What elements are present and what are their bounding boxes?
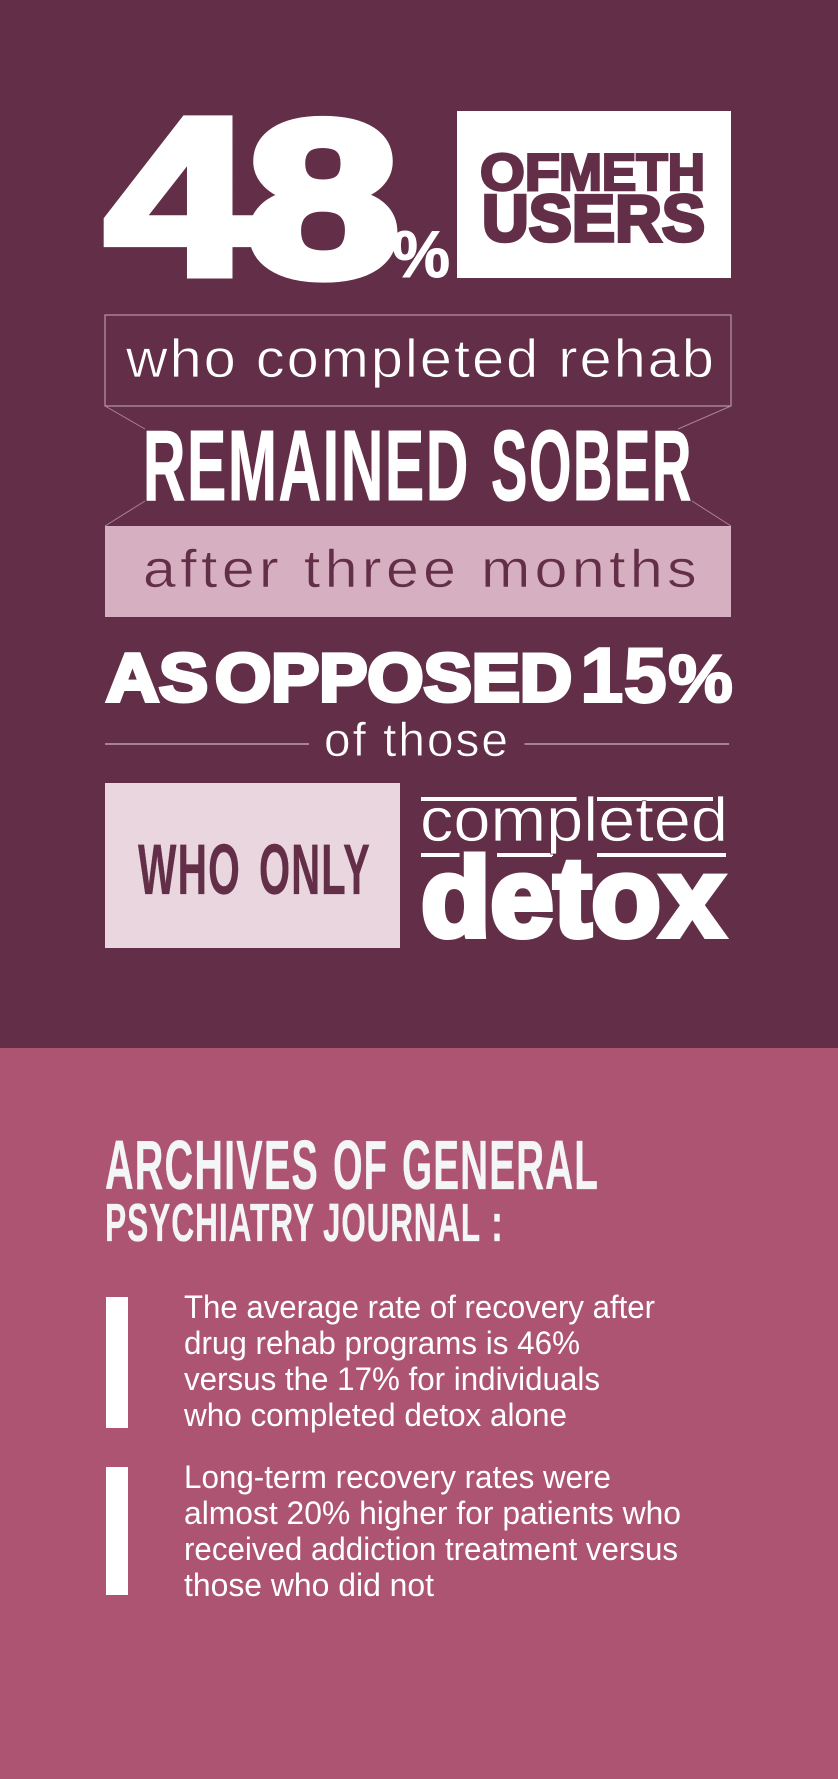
finding 2: [106, 1459, 681, 1603]
callout: of meth users: [457, 111, 731, 278]
panel: journal findings: [0, 1048, 838, 1779]
divider with text: of those: of those: [324, 713, 510, 766]
box: who only: ONLY: [259, 831, 371, 910]
finding 2: those who did not: [184, 1567, 434, 1603]
heading: as opposed 15%: 15: [580, 631, 667, 719]
finding 1: who completed detox alone: [183, 1397, 567, 1433]
big number: 48%: %: [392, 217, 450, 291]
heading: archives of general psychiatry journal: JOURNAL: [323, 1193, 481, 1253]
callout: of meth users: OF: [480, 144, 560, 202]
callout: of meth users: USERS: [482, 181, 705, 255]
finding 1: The average rate of recovery after: [184, 1289, 655, 1325]
heading: remained sober: REMAINED: [143, 410, 470, 522]
heading: archives of general psychiatry journal: :: [491, 1193, 503, 1253]
finding 1: drug rehab programs is 46%: [184, 1325, 580, 1361]
big number: 48%: 8: [247, 76, 399, 322]
heading: as opposed 15%: AS: [106, 640, 208, 716]
big number: 48%: 4: [105, 72, 253, 322]
big number: 48%: [105, 72, 450, 322]
outlined box: who completed rehab: who completed rehab: [125, 329, 716, 389]
bracket rules around completed: [421, 797, 726, 857]
finding 2: almost 20% higher for patients who: [184, 1495, 681, 1531]
box: who only: WHO: [138, 831, 241, 910]
lockup: completed detox: completed: [420, 786, 728, 855]
finding 2: Long-term recovery rates were: [184, 1459, 611, 1495]
heading: archives of general psychiatry journal: GENERAL: [402, 1126, 599, 1204]
heading: archives of general psychiatry journal: [105, 1126, 599, 1253]
heading: as opposed 15%: %: [668, 641, 733, 717]
box: who only: [105, 783, 400, 948]
outlined box: who completed rehab: [105, 315, 731, 406]
finding 1: versus the 17% for individuals: [184, 1361, 600, 1397]
heading: archives of general psychiatry journal: PSYCHIATRY: [105, 1193, 315, 1253]
panel: top statistics: [0, 0, 838, 1048]
lockup: completed detox: detox: [421, 835, 724, 960]
callout: of meth users: METH: [559, 144, 705, 202]
banner: after three months: after three months: [143, 540, 701, 599]
finding 2: received addiction treatment versus: [184, 1531, 678, 1567]
banner: after three months: [105, 526, 731, 617]
heading: as opposed 15%: OPPOSED: [215, 640, 572, 716]
heading: as opposed 15%: [106, 631, 733, 719]
lockup: completed detox: [420, 786, 728, 960]
heading: archives of general psychiatry journal: OF: [333, 1126, 388, 1204]
heading: archives of general psychiatry journal: ARCHIVES: [105, 1126, 319, 1204]
finding 1: [106, 1289, 655, 1433]
connector lines: [105, 406, 731, 526]
